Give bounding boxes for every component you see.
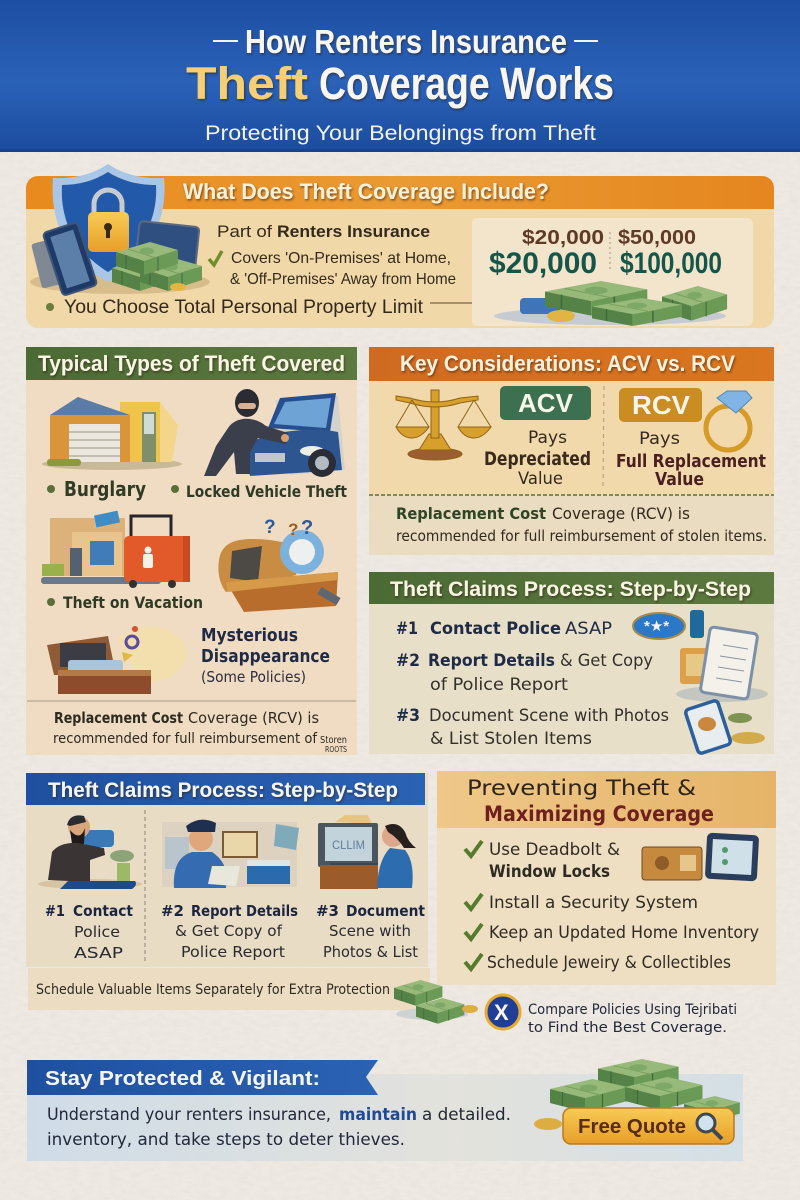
- icon: police badge and phone: *★*: [644, 618, 669, 635]
- icon: mysterious chest: [47, 626, 186, 694]
- note: replacement cost: Storen: [320, 735, 347, 746]
- panel: what does theft coverage include: [26, 164, 774, 328]
- badge: rcv: Value: [655, 469, 704, 490]
- subtitle: Protecting Your Belongings from Theft: [205, 122, 596, 145]
- icon: police badge and phone: [633, 610, 704, 639]
- heading: Key Considerations: ACV vs. RCV: [400, 351, 735, 376]
- panel: theft claims process left: [26, 773, 430, 1010]
- heading: Theft Claims Process: Step-by-Step: [390, 578, 751, 601]
- step 2: #2: [396, 651, 420, 671]
- header banner: [0, 0, 800, 152]
- text: part of renters insurance: Covers 'On-Premises' at Home,: [231, 250, 451, 267]
- icon: tejribati logo: [486, 995, 520, 1029]
- step 1: [396, 619, 612, 639]
- note: replacement cost: recommended for full reimbursement of: [53, 731, 318, 747]
- badge: acv: [484, 386, 591, 489]
- step 2 label: Report Details: [191, 902, 298, 920]
- icon: cash stacks: [534, 1059, 740, 1130]
- icon: shield, lock, tablet and cash: [30, 164, 210, 296]
- label: burglary: Burglary: [64, 477, 146, 501]
- badge: acv: Pays: [528, 428, 567, 448]
- item: deadbolt: Window Locks: [489, 862, 610, 882]
- step 3: Document Scene with Photos: [429, 706, 669, 726]
- label: mysterious disappearance: Disappearance: [201, 646, 330, 667]
- step 1 label: Contact: [73, 902, 134, 920]
- step 2 label: & Get Copy of: [175, 922, 283, 940]
- icon: clipboard and valuables: [685, 700, 765, 754]
- note: rcv recommendation: Replacement Cost: [396, 504, 546, 523]
- text: summary: Understand your renters insurance,: [47, 1105, 331, 1125]
- step 2: Report Details: [428, 651, 555, 671]
- step 3 label: [316, 902, 426, 961]
- title: How Renters Insurance: [245, 23, 567, 60]
- label: locked vehicle theft: Locked Vehicle Theft: [186, 482, 347, 501]
- title: Coverage Works: [319, 58, 614, 109]
- item: security system: Install a Security System: [489, 893, 698, 913]
- badge: rcv: Pays: [639, 429, 680, 449]
- icon: house with garage: [42, 397, 182, 470]
- panel: stay protected: [27, 1059, 743, 1161]
- step 2: of Police Report: [430, 675, 568, 695]
- icon: cash pile: [494, 281, 727, 326]
- panel: theft claims process right: [369, 572, 774, 754]
- inset: coverage limits: $20,000: [489, 247, 597, 280]
- icon: person at computer: CLLIM: [332, 838, 365, 852]
- label: mysterious disappearance: Mysterious: [201, 625, 298, 646]
- icon: magnifier: [697, 1114, 722, 1139]
- text: summary: a detailed.: [422, 1105, 511, 1125]
- panel: typical types of theft covered: [26, 347, 357, 755]
- icon: open suitcase with question marks: ?: [288, 520, 298, 539]
- badge: acv: Value: [518, 469, 563, 489]
- step 3 label: #3: [316, 902, 339, 920]
- step 2: & Get Copy: [560, 651, 653, 671]
- note: replacement cost: Replacement Cost: [54, 709, 183, 727]
- step 3 label: Scene with: [329, 922, 411, 940]
- callout: compare policies: to Find the Best Coverage.: [528, 1020, 727, 1036]
- step 3 label: Document: [346, 902, 426, 920]
- button: free quote: [563, 1108, 734, 1144]
- panel: preventing theft: [437, 771, 776, 985]
- step 2 label: Police Report: [181, 943, 285, 961]
- ribbon heading: Stay Protected & Vigilant:: [45, 1068, 320, 1090]
- title: Theft: [186, 58, 308, 109]
- icon: report on tablet: [676, 627, 768, 702]
- label: mysterious disappearance: (Some Policies): [201, 668, 306, 686]
- item: deadbolt: [465, 840, 620, 882]
- note: rcv recommendation: [396, 504, 767, 545]
- callout: compare policies: Compare Policies Using Tejribati: [528, 1002, 737, 1018]
- step 1 label: ASAP: [74, 944, 123, 962]
- inset: coverage limits: [472, 218, 753, 326]
- text: part of renters insurance: [209, 223, 456, 288]
- item: home inventory: Keep an Updated Home Inventory: [489, 923, 759, 943]
- inset: coverage limits: $50,000: [618, 227, 696, 249]
- badge: acv: Depreciated: [484, 448, 591, 470]
- panel: key considerations acv vs rcv: [369, 347, 774, 555]
- inset: coverage limits: $20,000: [522, 227, 604, 249]
- step 3: & List Stolen Items: [430, 729, 592, 749]
- inset: coverage limits: $100,000: [620, 247, 722, 280]
- text: summary: [47, 1105, 511, 1150]
- badge: acv: ACV: [518, 388, 574, 418]
- ribbon heading: [27, 1060, 378, 1095]
- note: replacement cost: Coverage (RCV) is: [188, 709, 319, 727]
- note: replacement cost: ROOTS: [325, 745, 347, 754]
- heading: What Does Theft Coverage Include?: [183, 179, 549, 204]
- label: theft on vacation: Theft on Vacation: [63, 593, 203, 612]
- note: rcv recommendation: recommended for full reimbursement of stolen items.: [396, 527, 767, 545]
- text: summary: inventory, and take steps to deter thieves.: [47, 1130, 405, 1150]
- title: [186, 23, 614, 109]
- icon: open suitcase with question marks: ?: [264, 517, 276, 538]
- step 3: #3: [396, 706, 420, 726]
- step 1: #1: [396, 619, 418, 639]
- item: schedule jewelry: Schedule Jeweiry & Collectibles: [487, 953, 731, 973]
- step 1 label: Police: [74, 923, 120, 941]
- icon: open suitcase with question marks: ?: [301, 517, 313, 539]
- note: schedule valuable items: Schedule Valuable Items Separately for Extra Protection: [36, 982, 390, 998]
- step 2 label: #2: [161, 902, 184, 920]
- heading: Maximizing Coverage: [484, 802, 714, 826]
- icon: vacation house and suitcase: [41, 511, 190, 588]
- icon: police officer: [162, 820, 299, 888]
- badge: rcv: Full Replacement: [616, 451, 766, 472]
- icon: diamond ring: [706, 391, 752, 450]
- icon: balance scale: [396, 390, 491, 460]
- note: rcv recommendation: Coverage (RCV) is: [552, 504, 690, 523]
- heading: [467, 776, 714, 826]
- text: part of renters insurance: Renters Insurance: [277, 223, 430, 241]
- icon: person at computer: [318, 815, 416, 889]
- item: deadbolt: Use Deadbolt &: [489, 840, 620, 860]
- step 2 label: [161, 902, 298, 961]
- callout: compare policies: [486, 995, 737, 1036]
- icon: small cash stacks: [394, 980, 478, 1024]
- icon: tejribati logo: X: [494, 1000, 509, 1025]
- text: part of renters insurance: & 'Off-Premises' Away from Home: [230, 271, 456, 288]
- text: part of renters insurance: Part of: [217, 223, 272, 241]
- step 2: [396, 651, 653, 695]
- text: summary: maintain: [339, 1105, 417, 1125]
- button: free quote: Free Quote: [578, 1116, 686, 1138]
- badge: rcv: [616, 388, 766, 490]
- step 3 label: Photos & List: [323, 943, 418, 961]
- icon: open suitcase with question marks: [218, 517, 341, 612]
- heading: Typical Types of Theft Covered: [38, 351, 345, 376]
- note: replacement cost: [53, 709, 347, 754]
- step 1 label: #1: [45, 902, 65, 920]
- icon: thief at car: [204, 389, 345, 477]
- label: mysterious disappearance: [201, 625, 330, 686]
- badge: rcv: RCV: [632, 390, 691, 420]
- step 1 label: [45, 902, 134, 962]
- step 3: [396, 706, 669, 749]
- heading: Preventing Theft &: [467, 776, 696, 800]
- icon: safe and security tablet: [642, 833, 759, 881]
- text: limit bullet: You Choose Total Personal Property Limit: [64, 296, 424, 318]
- icon: thief making a report: [38, 815, 142, 889]
- step 1: Contact Police: [430, 619, 561, 639]
- step 1: ASAP: [565, 619, 612, 639]
- heading: Theft Claims Process: Step-by-Step: [48, 779, 398, 802]
